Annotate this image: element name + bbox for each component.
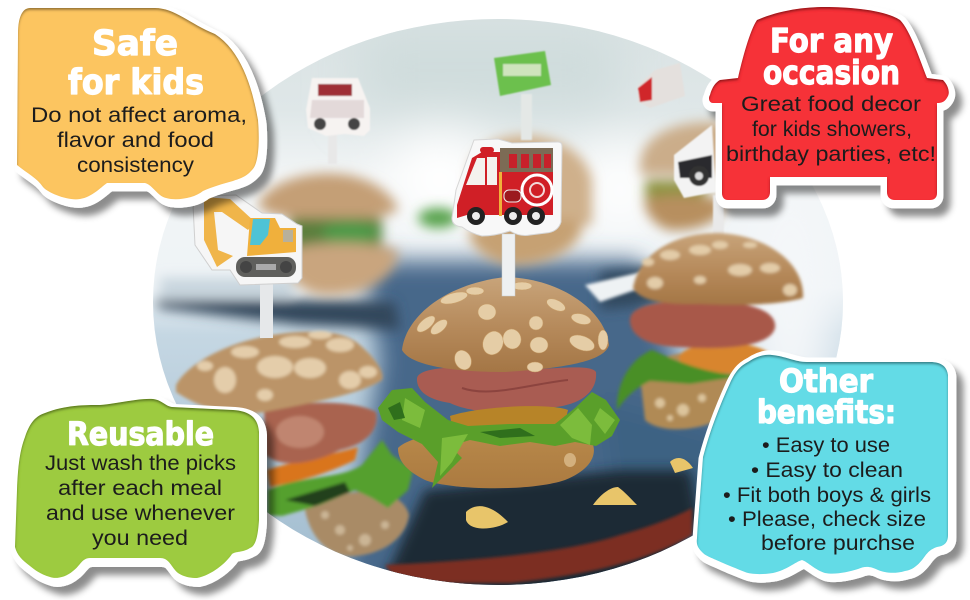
text: benefits list: • Easy to use [762, 434, 890, 457]
panel: safe for kids [17, 8, 262, 202]
text: benefits list: • Easy to clean [751, 459, 903, 482]
text: reusable description: after each meal [58, 477, 222, 500]
text: occasion description: Great food decor [741, 93, 921, 116]
panel: other benefits [697, 355, 950, 576]
badge shape: van [20, 11, 262, 202]
badge shape: bus [17, 402, 261, 581]
text: benefits list: • Fit both boys & girls [723, 484, 931, 507]
slate board [339, 242, 710, 585]
photo: burgers on a slate board [140, 10, 860, 600]
text: reusable description: you need [92, 527, 188, 550]
burger: left [176, 331, 413, 556]
text: occasion description: birthday parties, etc! [726, 143, 936, 166]
text: safe description: Do not affect aroma, [31, 104, 247, 127]
burger: right [617, 233, 803, 429]
heading: for any occasion: occasion [763, 53, 900, 92]
heading: other benefits: Other [779, 362, 873, 400]
text: safe description: consistency [77, 154, 195, 177]
blurred picks [306, 51, 724, 237]
heading: for any occasion: For any [770, 21, 893, 60]
heading: other benefits: benefits: [757, 393, 896, 431]
burger: centre [378, 277, 693, 583]
pick stick: fire truck [502, 234, 515, 296]
badge shape: car [709, 9, 949, 202]
text: benefits list: before purchse [761, 532, 915, 555]
heading: reusable: Reusable [67, 415, 214, 453]
pick stick: excavator [260, 282, 273, 338]
text: reusable description: Just wash the picks [45, 452, 236, 475]
pick: excavator [193, 195, 302, 285]
text: reusable description: and use whenever [46, 502, 235, 525]
pick: fire truck [452, 139, 562, 236]
text: safe description: flavor and food [57, 129, 214, 152]
background blurred burgers [258, 122, 740, 295]
heading: safe for kids: for kids [68, 63, 204, 103]
panel: reusable [15, 399, 261, 581]
heading: safe for kids: Safe [92, 24, 178, 64]
text: occasion description: for kids showers, [752, 118, 912, 141]
panel: for any occasion [709, 7, 949, 202]
text: benefits list: • Please, check size [728, 508, 926, 531]
badge shape: cloud van [699, 357, 950, 576]
